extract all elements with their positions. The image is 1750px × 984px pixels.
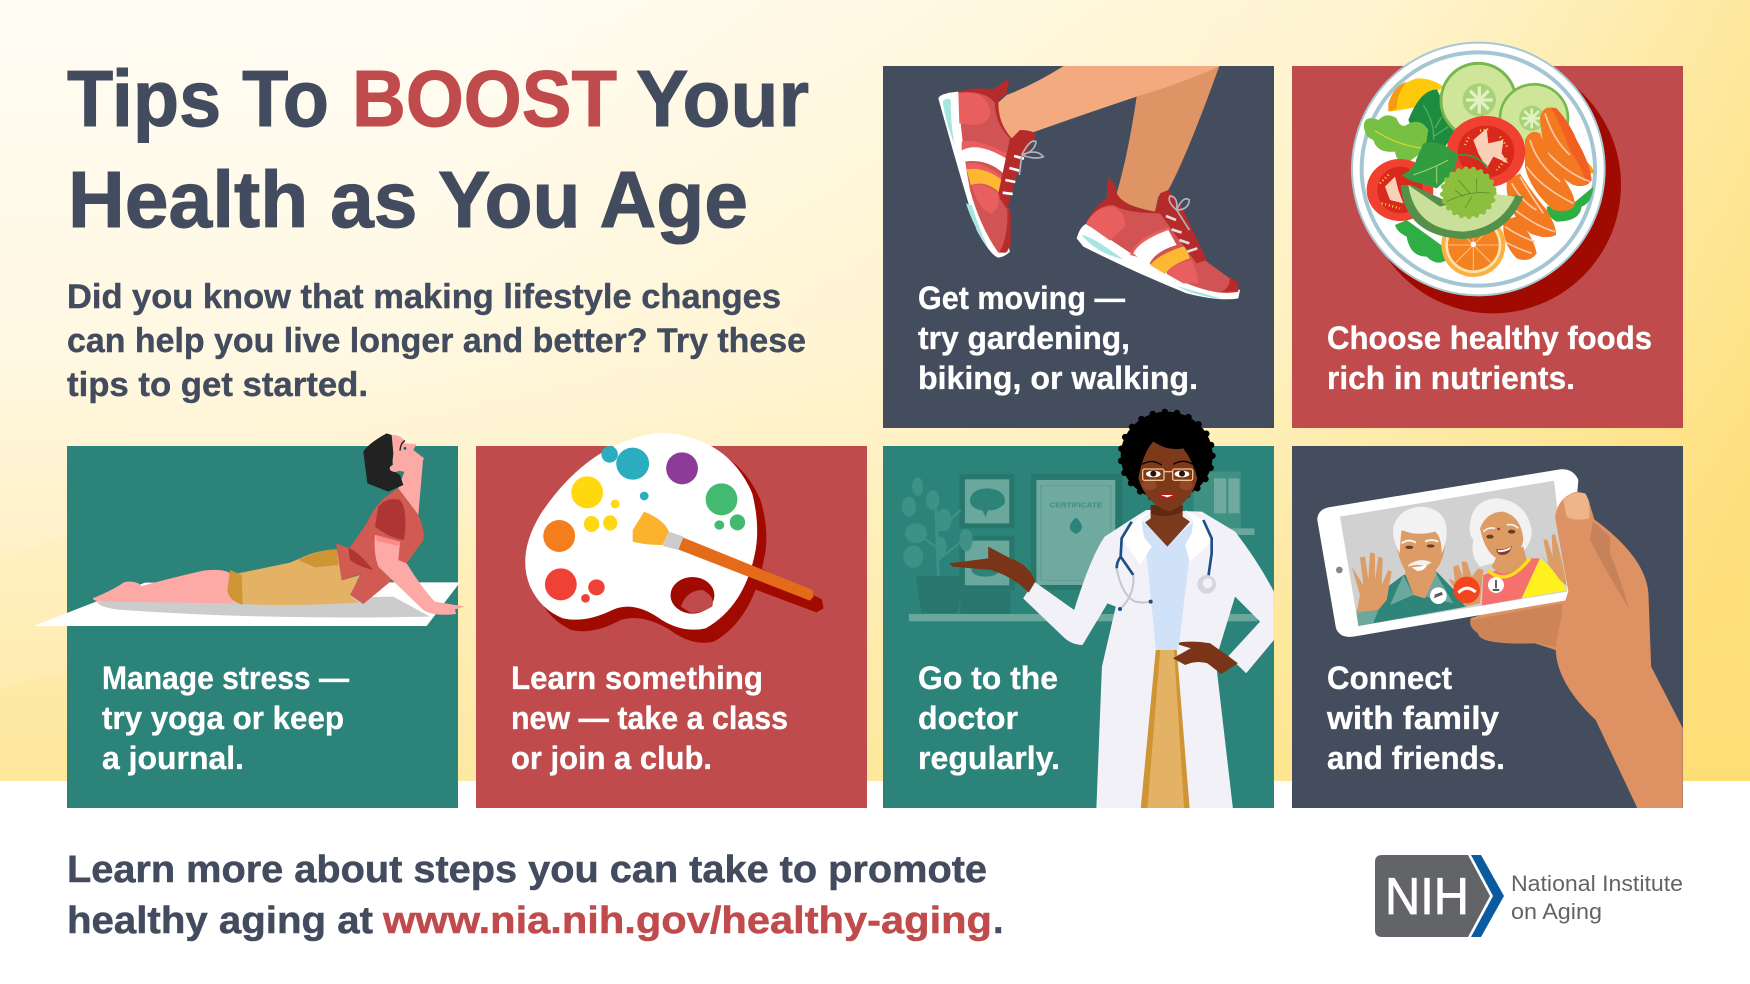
panel: connect with family	[1292, 446, 1683, 808]
logo: NIH National Institute on Aging: on Aging	[1511, 899, 1602, 924]
label: learn something new	[511, 660, 788, 776]
logo: NIH National Institute on Aging: National Institute	[1511, 871, 1683, 896]
label: healthy foods: rich in nutrients.	[1327, 360, 1575, 396]
label: healthy foods: Choose healthy foods	[1327, 320, 1652, 356]
title	[67, 54, 809, 244]
panel: learn something new	[476, 433, 867, 808]
label: get moving: try gardening,	[918, 320, 1130, 356]
footer call to action: www.nia.nih.gov/healthy-aging	[382, 900, 992, 942]
intro paragraph: tips to get started.	[67, 366, 368, 404]
title: BOOST	[352, 54, 617, 143]
intro paragraph	[67, 278, 806, 404]
title: Health as You Age	[68, 155, 748, 244]
label: learn something new: new — take a class	[511, 700, 788, 736]
icon: hand holding phone on a video call	[1317, 469, 1683, 808]
icon: person doing yoga on a mat	[33, 433, 465, 626]
label: learn something new: or join a club.	[511, 740, 712, 776]
footer call to action: .	[993, 900, 1004, 942]
footer call to action	[67, 849, 1004, 942]
office background	[902, 472, 1257, 621]
intro paragraph: Did you know that making lifestyle changes	[67, 278, 781, 316]
label: go to the doctor	[918, 660, 1060, 776]
panel: manage stress	[33, 433, 465, 808]
intro paragraph: can help you live longer and better? Try these	[67, 322, 806, 360]
label: manage stress: a journal.	[102, 740, 244, 776]
footer call to action: Learn more about steps you can take to promote	[67, 849, 987, 891]
title: Your	[636, 54, 809, 143]
title: Tips To	[67, 54, 329, 143]
office background: CERTIFICATE	[1049, 501, 1102, 510]
label: go to the doctor: doctor	[918, 700, 1018, 736]
label: healthy foods	[1327, 320, 1652, 396]
label: go to the doctor: Go to the	[918, 660, 1058, 696]
logo: NIH National Institute on Aging: NIH	[1385, 868, 1469, 926]
logo: NIH National Institute on Aging	[1375, 855, 1683, 937]
label: connect with family	[1326, 660, 1505, 776]
label: manage stress: Manage stress —	[102, 660, 349, 696]
icon: doctor in white coat	[949, 412, 1274, 808]
panel: healthy foods	[1292, 42, 1683, 428]
label: manage stress	[102, 660, 349, 776]
icon: running legs and shoes	[938, 66, 1240, 299]
label: go to the doctor: regularly.	[918, 740, 1060, 776]
panel: go to the doctor	[883, 412, 1274, 808]
label: manage stress: try yoga or keep	[102, 700, 344, 736]
label: connect with family: Connect	[1327, 660, 1452, 696]
label: learn something new: Learn something	[511, 660, 763, 696]
icon: plate of salad	[1351, 42, 1621, 313]
label: connect with family: with family	[1326, 700, 1499, 736]
label: get moving	[918, 280, 1198, 396]
icon: paint palette and brush	[525, 433, 824, 643]
label: get moving: Get moving —	[918, 280, 1125, 316]
label: connect with family: and friends.	[1327, 740, 1505, 776]
footer call to action: healthy aging at	[67, 900, 373, 942]
panel: get moving	[883, 66, 1274, 428]
label: get moving: biking, or walking.	[918, 360, 1198, 396]
